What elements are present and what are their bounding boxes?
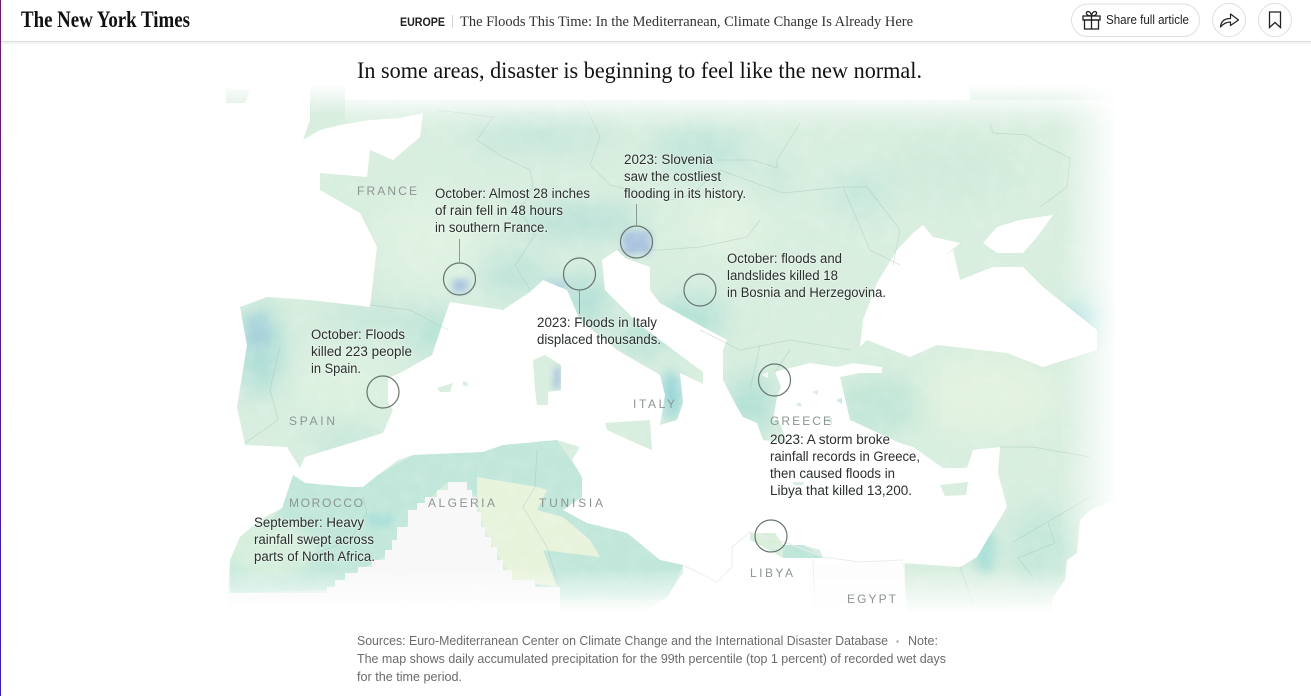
marker circles and leader lines <box>367 204 790 552</box>
country labels: EGYPT <box>847 592 897 606</box>
annotation: Slovenia: flooding in its history. <box>624 186 746 201</box>
annotation: Greece and Libya: 2023: A storm broke <box>770 432 890 447</box>
annotation: southern France <box>435 186 590 235</box>
annotation: Spain: October: Floods <box>311 327 405 342</box>
annotation: Greece and Libya <box>770 432 920 498</box>
share button <box>1072 4 1200 36</box>
country labels: FRANCE <box>357 184 417 198</box>
annotation: Italy: displaced thousands. <box>537 332 661 347</box>
section label: EUROPE <box>400 17 445 29</box>
header bar <box>0 0 1311 44</box>
terrain texture <box>251 234 680 410</box>
annotation: Slovenia: 2023: Slovenia <box>624 152 713 167</box>
map: precipitation over the Mediterranean <box>226 90 1110 608</box>
country labels: MOROCCO <box>289 496 363 510</box>
annotation: Bosnia: October: floods and <box>727 251 842 266</box>
country labels: LIBYA <box>750 566 793 580</box>
annotation: Bosnia: landslides killed 18 <box>727 268 838 283</box>
annotation: Bosnia <box>727 251 886 300</box>
annotation: southern France: in southern France. <box>435 220 548 235</box>
annotation: North Africa: rainfall swept across <box>254 532 374 547</box>
country labels: GREECE <box>770 414 831 428</box>
sources note <box>357 634 946 684</box>
annotation: Greece and Libya: then caused floods in <box>770 466 895 481</box>
country labels: ITALY <box>633 397 675 411</box>
left window edge <box>0 0 1 696</box>
annotation: Slovenia <box>624 152 746 201</box>
country labels: ALGERIA <box>428 496 495 510</box>
annotation: Bosnia: in Bosnia and Herzegovina. <box>727 285 886 300</box>
icon: bookmark <box>1258 4 1292 36</box>
sources note: Sources: Euro-Mediterranean Center on Climate Change and the International Disaster Database <box>357 634 888 648</box>
annotation: Slovenia: saw the costliest <box>624 169 721 184</box>
annotation: North Africa: parts of North Africa. <box>254 549 375 564</box>
annotation: Greece and Libya: Libya that killed 13,200. <box>770 483 912 498</box>
annotation: Spain: killed 223 people <box>311 344 412 359</box>
Libya coastal patch <box>750 533 783 545</box>
annotation: North Africa <box>254 515 375 564</box>
annotation: southern France: of rain fell in 48 hours <box>435 203 563 218</box>
logo: The New York Times <box>21 7 190 32</box>
annotation: North Africa: September: Heavy <box>254 515 364 530</box>
country labels <box>289 184 897 606</box>
country borders <box>245 95 1090 610</box>
sources note: The map shows daily accumulated precipitation for the 99th percentile (top 1 percent) of recorded wet days <box>357 652 946 666</box>
North Africa green band <box>230 440 683 600</box>
icon: gift <box>1083 12 1100 29</box>
sources note: Note: <box>908 634 938 648</box>
article headline: The Floods This Time: In the Mediterranean, Climate Change Is Already Here <box>460 14 913 30</box>
pale desert zone <box>228 482 560 602</box>
sources note: for the time period. <box>357 670 462 684</box>
white title backing <box>345 44 970 100</box>
annotation: Greece and Libya: rainfall records in Greece, <box>770 449 920 464</box>
country labels: TUNISIA <box>539 496 603 510</box>
title: In some areas, disaster is beginning to feel like the new normal. <box>357 58 922 84</box>
country labels: SPAIN <box>289 414 335 428</box>
annotation: Italy: 2023: Floods in Italy <box>537 315 657 330</box>
faint desert coast <box>683 532 903 582</box>
annotation: Spain <box>311 327 412 376</box>
annotation: southern France: October: Almost 28 inches <box>435 186 590 201</box>
yellow semi-arid zone <box>477 477 600 587</box>
map edge fades <box>205 70 1128 630</box>
share button: Share full article <box>1106 13 1189 27</box>
icon: share <box>1212 4 1246 36</box>
annotation: Spain: in Spain. <box>311 361 361 376</box>
annotation: Italy <box>537 315 661 347</box>
